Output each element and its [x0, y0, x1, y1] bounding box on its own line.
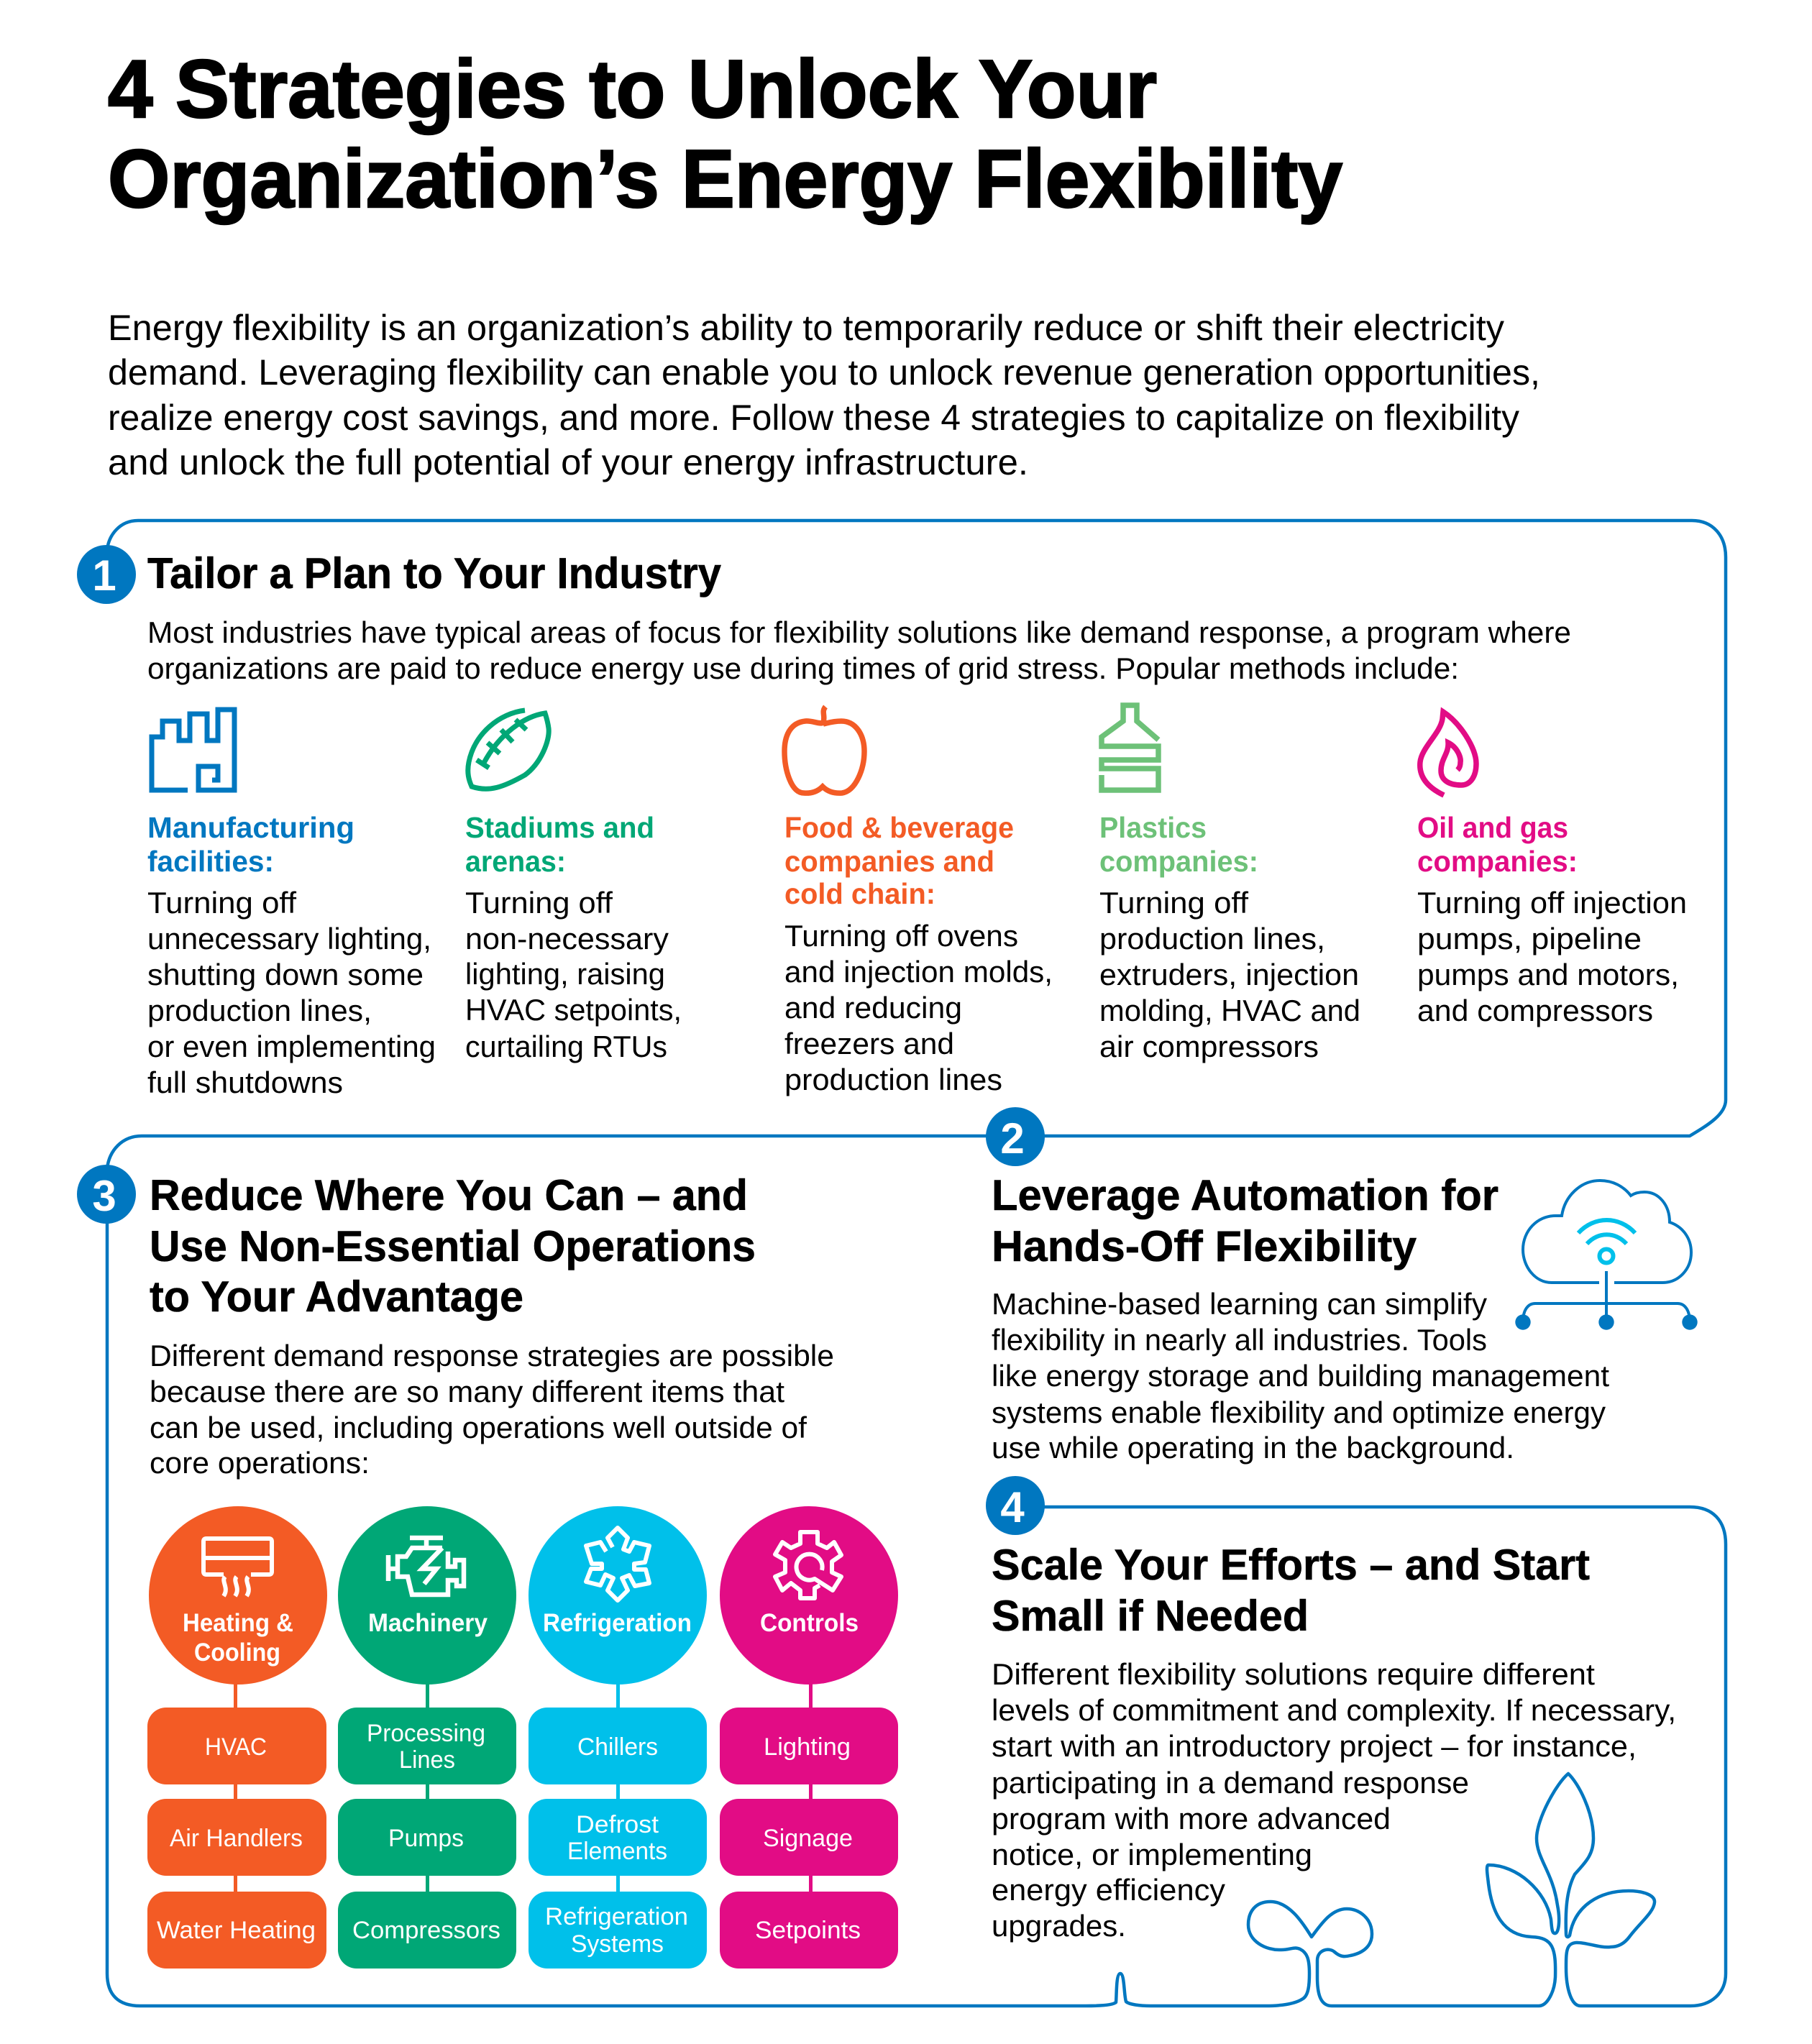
text: section 4 body: Different flexibility solutions require different: [992, 1657, 1595, 1691]
column: oil and gas: Oil and gas: [1417, 811, 1568, 844]
column: manufacturing: or even implementing: [147, 1030, 436, 1063]
text: section 3 body: because there are so many different items that: [150, 1375, 784, 1408]
intro paragraph: demand. Leveraging flexibility can enable you to unlock revenue generation opportunities,: [108, 352, 1540, 393]
badge: number 4: 4: [1000, 1483, 1025, 1531]
text: section 2 body: Machine-based learning can simplify: [992, 1287, 1487, 1321]
column: machinery: Processing: [367, 1720, 485, 1747]
column: manufacturing: facilities:: [147, 845, 274, 878]
icon: flame: [1420, 712, 1476, 795]
text: section 2 body: flexibility in nearly all industries. Tools: [992, 1323, 1487, 1357]
text: section 4 body: notice, or implementing: [992, 1838, 1312, 1871]
heading: reduce where you can: [150, 1171, 756, 1321]
column: controls: Setpoints: [755, 1917, 861, 1944]
column: refrigeration: Systems: [571, 1930, 664, 1958]
heading: leverage automation: [992, 1171, 1498, 1270]
column: machinery: Lines: [399, 1746, 455, 1774]
badge: number 4: [986, 1476, 1045, 1535]
badge: number 3: 3: [92, 1172, 116, 1220]
column: oil and gas: [1417, 712, 1687, 1027]
column: stadiums: arenas:: [465, 845, 566, 878]
column: refrigeration: Defrost: [576, 1811, 659, 1838]
frame: section 4 and 3 outline with sprouting plants: [107, 1222, 1726, 2006]
column: manufacturing: [147, 710, 436, 1099]
column: refrigeration: Refrigeration: [545, 1903, 688, 1930]
text: section 2 body: use while operating in the background.: [992, 1431, 1514, 1465]
heading: leverage automation: Leverage Automation for: [992, 1171, 1498, 1219]
panel: section 4 text: [992, 1541, 1676, 1943]
text: section 1 body: organizations are paid to reduce energy use during times of grid stress. Popular methods include:: [147, 651, 1459, 685]
column: machinery: [338, 1506, 516, 1969]
icon: apple: [784, 707, 864, 793]
column: refrigeration: Chillers: [577, 1733, 658, 1761]
column: food and beverage: companies and: [784, 845, 994, 878]
column: stadiums: Stadiums and: [465, 811, 654, 844]
icon: cloud with wifi and network: [1515, 1181, 1698, 1330]
column: manufacturing: shutting down some: [147, 958, 424, 991]
column: machinery: Machinery: [368, 1609, 488, 1637]
column: stadiums: lighting, raising: [465, 957, 665, 991]
text: section 4 body: energy efficiency: [992, 1873, 1225, 1907]
text: section 4 body: [992, 1657, 1676, 1943]
column: machinery: Pumps: [388, 1825, 464, 1852]
intro paragraph: [108, 308, 1540, 482]
column: food and beverage: production lines: [784, 1063, 1002, 1096]
column: plastics: Plastics: [1099, 811, 1207, 844]
column: oil and gas: companies:: [1417, 845, 1578, 878]
column: food and beverage: and reducing: [784, 991, 962, 1025]
column: manufacturing: Manufacturing: [147, 811, 354, 844]
icon: snowflake: [586, 1528, 649, 1600]
column: manufacturing: full shutdowns: [147, 1065, 343, 1099]
badge: number 1: 1: [92, 551, 116, 600]
panel: section 3 text: [150, 1171, 834, 1480]
column: stadiums: [465, 710, 682, 1063]
text: section 3 body: core operations:: [150, 1446, 370, 1480]
column: manufacturing: Turning off: [147, 886, 296, 920]
heading: scale your efforts: Small if Needed: [992, 1592, 1309, 1640]
column: plastics: extruders, injection: [1099, 958, 1359, 991]
title: [108, 44, 1342, 225]
column: food and beverage: cold chain:: [784, 877, 935, 910]
text: section 4 body: upgrades.: [992, 1909, 1126, 1943]
column: controls: Controls: [760, 1609, 859, 1637]
column: food and beverage: freezers and: [784, 1027, 954, 1060]
text: section 2 body: like energy storage and building management: [992, 1359, 1609, 1393]
heading: reduce where you can: Reduce Where You Can – and: [150, 1171, 748, 1219]
column: oil and gas: pumps, pipeline: [1417, 922, 1642, 955]
panel: section 2 text: [992, 1171, 1609, 1465]
heading: scale your efforts: [992, 1541, 1590, 1640]
text: section 2 body: [992, 1287, 1609, 1465]
column: heating and cooling: Air Handlers: [170, 1825, 303, 1852]
column: plastics: production lines,: [1099, 922, 1325, 955]
text: section 2 body: systems enable flexibility and optimize energy: [992, 1395, 1606, 1429]
column: heating and cooling: Heating &: [183, 1609, 293, 1637]
column: plastics: molding, HVAC and: [1099, 994, 1360, 1027]
column: stadiums: Turning off: [465, 886, 613, 920]
column: oil and gas: pumps and motors,: [1417, 958, 1679, 991]
heading: reduce where you can: to Your Advantage: [150, 1273, 523, 1321]
column: controls: Signage: [763, 1825, 853, 1852]
title: 4 Strategies to Unlock Your: [108, 44, 1157, 135]
title: Organization’s Energy Flexibility: [108, 134, 1342, 225]
column: heating and cooling: HVAC: [205, 1733, 267, 1761]
heading: leverage automation: Hands-Off Flexibility: [992, 1222, 1417, 1270]
column: plastics: Turning off: [1099, 886, 1248, 920]
column: heating and cooling: Water Heating: [157, 1917, 316, 1944]
heading: reduce where you can: Use Non-Essential Operations: [150, 1222, 756, 1270]
column: controls: [720, 1506, 898, 1969]
column: manufacturing: unnecessary lighting,: [147, 922, 431, 955]
icon: factory: [152, 710, 234, 790]
column: stadiums: HVAC setpoints,: [465, 993, 682, 1027]
text: section 1 body: Most industries have typical areas of focus for flexibility solutions like demand response, a program where: [147, 615, 1571, 649]
icon: gear with magnifier: [775, 1532, 841, 1598]
badge: number 1: [77, 545, 136, 604]
column: refrigeration: [528, 1506, 707, 1969]
badge: number 2: 2: [1000, 1114, 1025, 1163]
column: food and beverage: Turning off ovens: [784, 919, 1018, 953]
column: plastics: [1099, 705, 1360, 1063]
column: heating and cooling: [147, 1506, 327, 1969]
heading: tailor a plan: Tailor a Plan to Your Industry: [147, 549, 722, 597]
heading: scale your efforts: Scale Your Efforts – and Start: [992, 1541, 1590, 1589]
text: section 4 body: start with an introductory project – for instance,: [992, 1729, 1637, 1763]
text: section 4 body: participating in a demand response: [992, 1766, 1469, 1800]
column: food and beverage: [784, 707, 1053, 1096]
column: refrigeration: Elements: [567, 1838, 667, 1865]
column: heating and cooling: Cooling: [194, 1639, 280, 1667]
icon: football: [468, 710, 549, 789]
column: stadiums: non-necessary: [465, 922, 669, 955]
text: section 3 body: Different demand response strategies are possible: [150, 1339, 834, 1372]
badge: number 2: [986, 1107, 1045, 1166]
text: section 3 body: can be used, including operations well outside of: [150, 1411, 807, 1444]
frame: section 1 outline: [107, 521, 1726, 1136]
intro paragraph: Energy flexibility is an organization’s ability to temporarily reduce or shift their electricity: [108, 308, 1504, 348]
column: plastics: companies:: [1099, 845, 1258, 878]
intro paragraph: realize energy cost savings, and more. Follow these 4 strategies to capitalize on flexibility: [108, 398, 1519, 438]
column: plastics: air compressors: [1099, 1030, 1319, 1063]
column: stadiums: curtailing RTUs: [465, 1030, 667, 1063]
column: oil and gas: and compressors: [1417, 994, 1653, 1027]
column: controls: Lighting: [764, 1733, 851, 1761]
frame: section 3 top outline: [107, 1136, 1003, 1168]
column: food and beverage: and injection molds,: [784, 955, 1053, 989]
icon: bottle: [1102, 705, 1158, 790]
column: manufacturing: production lines,: [147, 994, 372, 1027]
icon: air conditioner: [203, 1539, 272, 1596]
text: section 3 body: [150, 1339, 834, 1480]
column: oil and gas: Turning off injection: [1417, 886, 1687, 920]
column: machinery: Compressors: [352, 1917, 500, 1944]
text: section 4 body: levels of commitment and complexity. If necessary,: [992, 1693, 1676, 1727]
text: section 4 body: program with more advanced: [992, 1802, 1391, 1836]
column: food and beverage: Food & beverage: [784, 811, 1014, 844]
badge: number 3: [77, 1165, 136, 1224]
intro paragraph: and unlock the full potential of your energy infrastructure.: [108, 442, 1028, 482]
text: section 1 body: [147, 615, 1571, 685]
column: refrigeration: Refrigeration: [543, 1609, 692, 1637]
icon: engine: [388, 1538, 464, 1595]
